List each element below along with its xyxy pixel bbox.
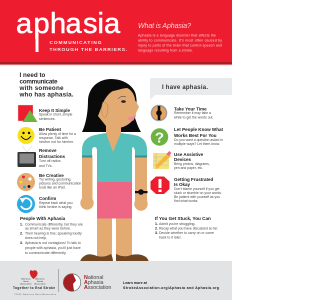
heading: I need to communicate: with someone bbox=[18, 85, 64, 92]
text: people with aphasia: 3. bbox=[20, 241, 23, 245]
logo: american heart association: American bbox=[35, 278, 45, 280]
logo: national aphasia association bbox=[58, 269, 111, 292]
speech bubble: I have aphasia bbox=[150, 78, 232, 100]
text: people with aphasia bbox=[20, 216, 83, 255]
text: be creative: Be Creative bbox=[39, 173, 64, 178]
text: take your time bbox=[174, 106, 213, 120]
text: be patient: him/her not for him/her. bbox=[39, 140, 74, 144]
logo: american heart association: Heart bbox=[23, 280, 29, 283]
heading: I need to communicate bbox=[18, 72, 74, 98]
text: getting frustrated: stuck or stumble on your words. bbox=[174, 191, 222, 195]
heading: I need to communicate: I need to bbox=[20, 72, 46, 79]
legs bbox=[97, 216, 132, 258]
sleeve bands bbox=[82, 156, 147, 158]
icon: television bbox=[18, 146, 36, 167]
skirt bbox=[97, 181, 132, 218]
logo: american heart association: Together to End Stroke bbox=[13, 286, 55, 290]
text: getting frustrated: Getting Frustrated bbox=[174, 177, 214, 182]
text: be creative bbox=[39, 173, 81, 190]
speech bubble: I have aphasia: I have aphasia. bbox=[162, 85, 208, 91]
ear bbox=[102, 102, 108, 117]
logo: american heart association: Stroke bbox=[37, 280, 44, 283]
text: keep it simple: Keep It Simple bbox=[39, 108, 71, 113]
text: people with aphasia: people with aphasia, you'll just have bbox=[25, 246, 81, 250]
illustration: woman bbox=[79, 79, 149, 265]
text: people with aphasia: to communicate differently. bbox=[25, 251, 67, 255]
text: be patient: Allow plenty of time for a bbox=[39, 132, 76, 136]
icon: question mark: ? bbox=[155, 130, 164, 146]
panel: red header bbox=[0, 0, 232, 66]
watch bbox=[135, 189, 148, 195]
logo: american heart association: Association bbox=[20, 282, 32, 286]
logo: american heart association: ©2013, American Heart Association bbox=[14, 293, 56, 296]
text: confirm: think he/she is saying. bbox=[39, 205, 72, 209]
heading: what is aphasia: What is Aphasia? bbox=[138, 23, 191, 30]
text: if you get stuck: If You Get Stuck, You Can bbox=[155, 216, 211, 221]
icon: confirm arrow circle bbox=[17, 195, 35, 213]
text: people with aphasia: Their hearing is fine; speaking loudly bbox=[25, 232, 82, 236]
text: keep it simple: Speak in short, simple bbox=[39, 112, 72, 116]
text: if you get stuck: Recap what you have discussed so far. bbox=[159, 226, 218, 230]
text: let people know: Works Best For You bbox=[174, 133, 217, 138]
icon: exclamation octagon bbox=[150, 176, 170, 194]
heading: I need to communicate: who has aphasia. bbox=[18, 92, 74, 98]
subtitle: COMMUNICATING bbox=[50, 40, 102, 46]
text: remove distractions: Remove bbox=[39, 148, 57, 153]
text: use assistive devices bbox=[174, 152, 210, 170]
logo: national aphasia association: Aphasia bbox=[84, 280, 103, 286]
logo: american heart association: American bbox=[21, 278, 31, 280]
text: people with aphasia: as smart as they were before. bbox=[25, 226, 71, 230]
text: use assistive devices: Devices bbox=[174, 157, 192, 162]
text: be patient: Be Patient bbox=[39, 127, 62, 132]
logo: american heart association: Association bbox=[34, 282, 46, 286]
text: if you get stuck bbox=[155, 216, 218, 240]
text: be patient: response. Talk with bbox=[39, 136, 68, 140]
text: aphasia definition bbox=[138, 34, 222, 52]
text: use assistive devices: Use Assistive bbox=[174, 152, 204, 157]
text: aphasia definition: injury to parts of the brain that control speech and bbox=[138, 44, 222, 48]
lips bbox=[127, 117, 135, 121]
text: people with aphasia: Aphasia is not contagious! To talk to bbox=[25, 241, 81, 245]
eye bbox=[118, 96, 126, 103]
text: people with aphasia: People With Aphasia bbox=[20, 216, 66, 221]
text: getting frustrated: find what works. bbox=[174, 199, 198, 203]
logo: national aphasia association: Association bbox=[84, 285, 111, 291]
text: getting frustrated: Be patient with yourself as you bbox=[174, 195, 220, 199]
text: take your time: while to get the words out. bbox=[174, 116, 213, 120]
text: aphasia definition: language resulting from a stroke. bbox=[138, 48, 193, 52]
face bbox=[98, 88, 139, 129]
text: learn more: Learn more at bbox=[123, 281, 148, 285]
icon: watch bbox=[151, 105, 167, 121]
text: be creative: tools like an iPad. bbox=[39, 186, 66, 190]
text: remove distractions: and TVs. bbox=[39, 164, 53, 168]
text: people with aphasia: 2. bbox=[20, 232, 23, 236]
arms bbox=[80, 155, 148, 211]
icon: paint palette bbox=[17, 173, 35, 191]
text: aphasia definition: ability to communicate. It's most often caused by bbox=[138, 38, 222, 42]
text: use assistive devices: pen and paper, etc. bbox=[174, 166, 203, 170]
text: confirm: Confirm bbox=[39, 196, 56, 201]
hair bbox=[82, 79, 141, 132]
shoes bbox=[79, 254, 149, 265]
logo: american heart association bbox=[13, 270, 56, 296]
text: people with aphasia: 1. bbox=[20, 222, 23, 226]
text: take your time: Take Your Time bbox=[174, 106, 207, 112]
text: confirm bbox=[39, 196, 73, 209]
heading: I need to communicate: communicate bbox=[20, 78, 58, 86]
text: remove distractions: Turn off radios bbox=[39, 159, 61, 163]
text: remove distractions: Distractions bbox=[39, 154, 66, 159]
text: be creative: pictures and communication bbox=[39, 182, 81, 186]
text: if you get stuck: Admit you're struggling. bbox=[159, 222, 195, 226]
text: be patient bbox=[39, 127, 76, 144]
text: getting frustrated: Don't blame yourself if you get bbox=[174, 187, 220, 191]
text: confirm: Repeat back what you bbox=[39, 201, 73, 205]
logo: national aphasia association: National bbox=[84, 275, 103, 281]
icon: question mark bbox=[151, 128, 168, 146]
text: people with aphasia: does not help. bbox=[25, 236, 47, 240]
text: if you get stuck: back to it later. bbox=[159, 236, 182, 240]
text: let people know: Let People Know What bbox=[174, 127, 224, 132]
icon: red square and green triangle bbox=[18, 105, 38, 122]
text: people with aphasia: Communicate differently, but they are bbox=[25, 222, 83, 226]
panel: gray footer bbox=[0, 261, 232, 300]
text: let people know: Do you want a question asked in bbox=[174, 138, 223, 142]
text: getting frustrated: Is Okay bbox=[174, 182, 191, 187]
icon: notepad and pencil bbox=[153, 151, 171, 169]
text: if you get stuck: 2. bbox=[155, 226, 158, 230]
text: keep it simple: sentences. bbox=[39, 117, 55, 121]
text: if you get stuck: 1. bbox=[155, 222, 158, 226]
text: take your time: Remember it may take a bbox=[174, 111, 211, 115]
top bbox=[82, 133, 147, 182]
text: remove distractions bbox=[39, 148, 66, 168]
text: if you get stuck: 3. bbox=[155, 231, 158, 235]
text: learn more: StrokeAssociation.org/Aphasia and Aphasia.org bbox=[123, 286, 219, 290]
text: let people know bbox=[174, 127, 224, 146]
subtitle: THROUGH THE BARRIERS. bbox=[50, 47, 127, 53]
text: learn more bbox=[123, 281, 219, 290]
text: aphasia definition: Aphasia is a language disorder that affects the bbox=[138, 34, 216, 38]
icon: smiley face bbox=[18, 127, 34, 144]
text: use assistive devices: Bring photos, diagrams, bbox=[174, 162, 210, 166]
text: keep it simple bbox=[39, 108, 72, 121]
text: let people know: multiple ways? Let them know. bbox=[174, 142, 220, 146]
subtitle bbox=[50, 40, 127, 53]
title: aphasia bbox=[16, 8, 121, 40]
text: if you get stuck: Decide whether to carry on or come bbox=[159, 231, 214, 235]
text: be creative: Try writing, gesturing, bbox=[39, 178, 71, 182]
text: getting frustrated bbox=[174, 177, 222, 203]
neck and v-neck bbox=[106, 122, 121, 152]
